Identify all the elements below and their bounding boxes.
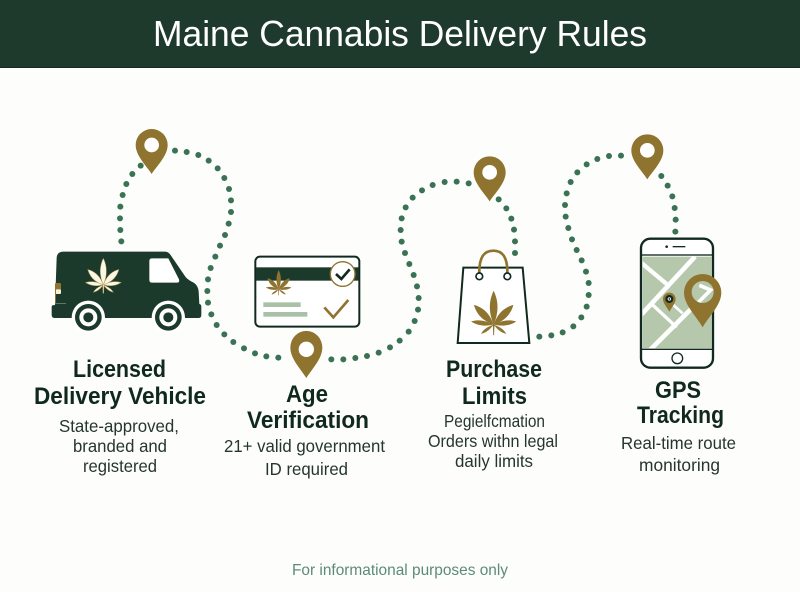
- dotted delivery route: [117, 148, 679, 362]
- description: Real-time route: [621, 433, 736, 453]
- description: [224, 436, 385, 479]
- icon: map pin 3: [474, 156, 506, 201]
- heading: Limits: [462, 383, 527, 410]
- heading: Age: [286, 381, 328, 408]
- panel: purchase limits: [428, 251, 558, 471]
- panel: age verification: [224, 257, 385, 479]
- icon: smartphone with map: [641, 239, 721, 368]
- description: monitoring: [639, 455, 720, 475]
- heading: [247, 381, 369, 434]
- heading: Licensed: [73, 356, 166, 383]
- heading: [446, 356, 542, 410]
- heading: Delivery Vehicle: [34, 383, 206, 410]
- panel: GPS tracking: [621, 239, 736, 475]
- heading: [34, 356, 206, 410]
- description: 21+ valid government: [224, 436, 385, 456]
- title: Maine Cannabis Delivery Rules: [153, 13, 647, 54]
- heading: Tracking: [637, 402, 724, 429]
- footer note: For informational purposes only: [292, 562, 508, 579]
- icon: delivery van: [52, 252, 201, 334]
- icon: map pin 1: [136, 129, 168, 174]
- description: Orders withn legal: [428, 431, 558, 451]
- description: daily limits: [455, 451, 533, 471]
- description: State-approved,: [59, 416, 179, 436]
- description: ID required: [265, 459, 348, 479]
- icon: large pin: [684, 274, 721, 327]
- icon: map pin 2: [290, 331, 322, 378]
- heading: Purchase: [446, 356, 542, 383]
- description: [59, 416, 179, 476]
- description: [621, 433, 736, 475]
- heading: [637, 377, 724, 429]
- icon: small pin: [663, 293, 676, 312]
- heading: GPS: [655, 377, 701, 404]
- description: registered: [83, 456, 157, 476]
- description: branded and: [73, 436, 167, 456]
- header banner: [0, 0, 800, 68]
- panel: licensed delivery vehicle: [34, 252, 206, 476]
- heading: Verification: [247, 407, 369, 434]
- icon: ID card: [255, 257, 359, 327]
- icon: shopping bag: [458, 251, 529, 343]
- description: Pegielfcmation: [444, 411, 545, 431]
- description: [428, 411, 558, 471]
- icon: map pin 4: [631, 134, 663, 179]
